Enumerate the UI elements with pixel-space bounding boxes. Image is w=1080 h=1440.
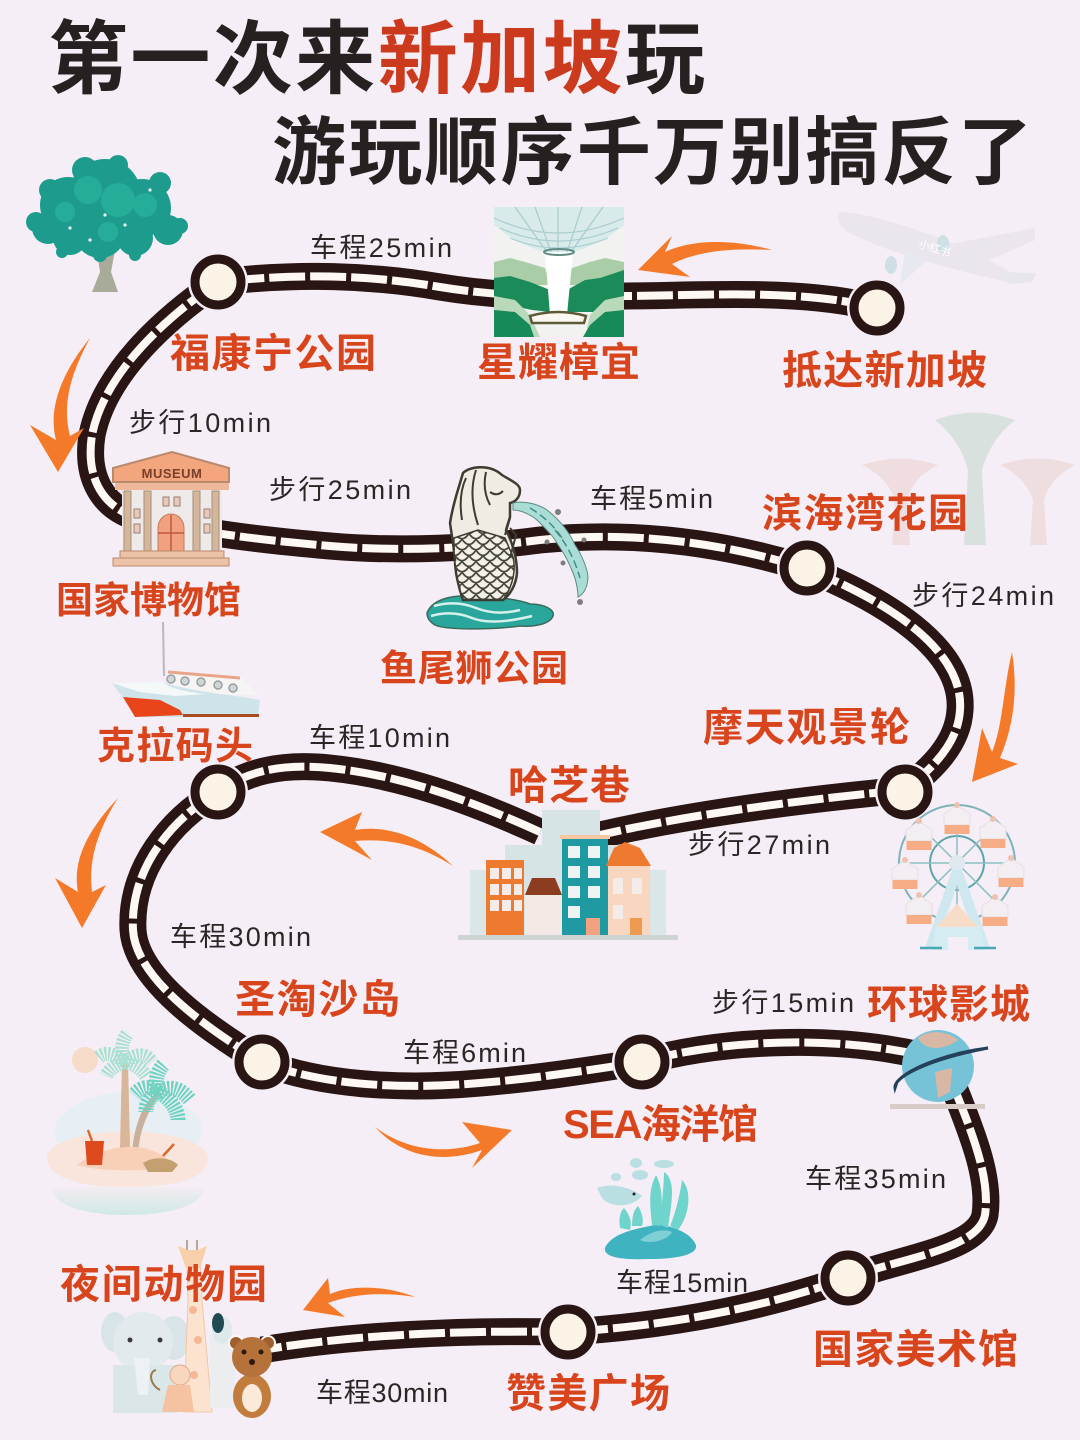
travel time labels: 车程5min [590,484,713,514]
arrow: to sentosa [55,798,118,928]
icon: museum: MUSEUM [142,466,202,481]
travel time labels: 步行10min [129,408,271,438]
place labels: SEA海洋馆 [563,1103,758,1147]
place labels: 摩天观景轮 [703,706,910,750]
arrow: to night safari [303,1278,415,1317]
icon: planet [890,1030,988,1109]
arrow: to jewel [638,236,772,277]
icon: cruise ship [112,622,260,717]
place labels: 国家美术馆 [813,1328,1018,1372]
icon: ferris wheel [892,802,1024,950]
route stop markers [188,252,935,1362]
title: 第一次来新加坡玩 [48,15,705,104]
title: 游玩顺序千万别搞反了 [272,111,1032,194]
arrow: to aquarium [375,1122,512,1168]
place labels: 星耀樟宜 [477,341,640,385]
travel time labels: 步行27min [688,830,830,860]
place labels: 环球影城 [867,983,1030,1027]
travel time labels: 车程35min [805,1164,946,1194]
arrow: to ferris wheel [972,652,1018,782]
place labels: 福康宁公园 [170,332,376,376]
icon: museum [113,452,229,566]
place labels: 国家博物馆 [56,580,241,621]
title [48,15,1032,194]
icon: jewel waterfall [494,207,624,337]
icon: supertrees [862,412,1075,545]
arrow: to clarke quay [320,812,453,866]
icon: merlion [427,467,588,629]
place labels: 克拉码头 [97,726,253,768]
place labels: 抵达新加坡 [782,349,987,393]
place labels: 夜间动物园 [60,1263,267,1307]
travel time labels: 步行25min [269,475,411,505]
arrow: to museum [30,338,90,472]
icon: zoo animals [101,1240,276,1418]
travel time labels: 车程30min [316,1378,448,1408]
travel time labels: 车程15min [616,1268,748,1298]
place labels: 鱼尾狮公园 [380,648,568,689]
travel time labels: 车程6min [403,1038,526,1068]
travel time labels: 步行15min [712,988,854,1018]
place labels: 哈芝巷 [508,764,630,808]
travel time labels: 步行24min [912,581,1054,611]
icon: airplane [838,212,1036,285]
icon: tree [26,155,188,292]
place labels: 滨海湾花园 [762,492,968,536]
icon: palm island [47,1033,208,1215]
travel time labels [129,233,1054,1408]
route road [91,276,986,1350]
travel time labels: 车程25min [310,233,452,263]
place labels: 圣淘沙岛 [235,978,400,1022]
place labels [56,332,1030,1416]
place labels: 赞美广场 [506,1372,670,1416]
travel time labels: 车程30min [170,922,311,952]
icon: shophouses [458,810,678,940]
travel time labels: 车程10min [309,723,450,753]
icon: airplane: 小红书 [917,237,952,260]
icon: coral and fish [597,1158,696,1259]
